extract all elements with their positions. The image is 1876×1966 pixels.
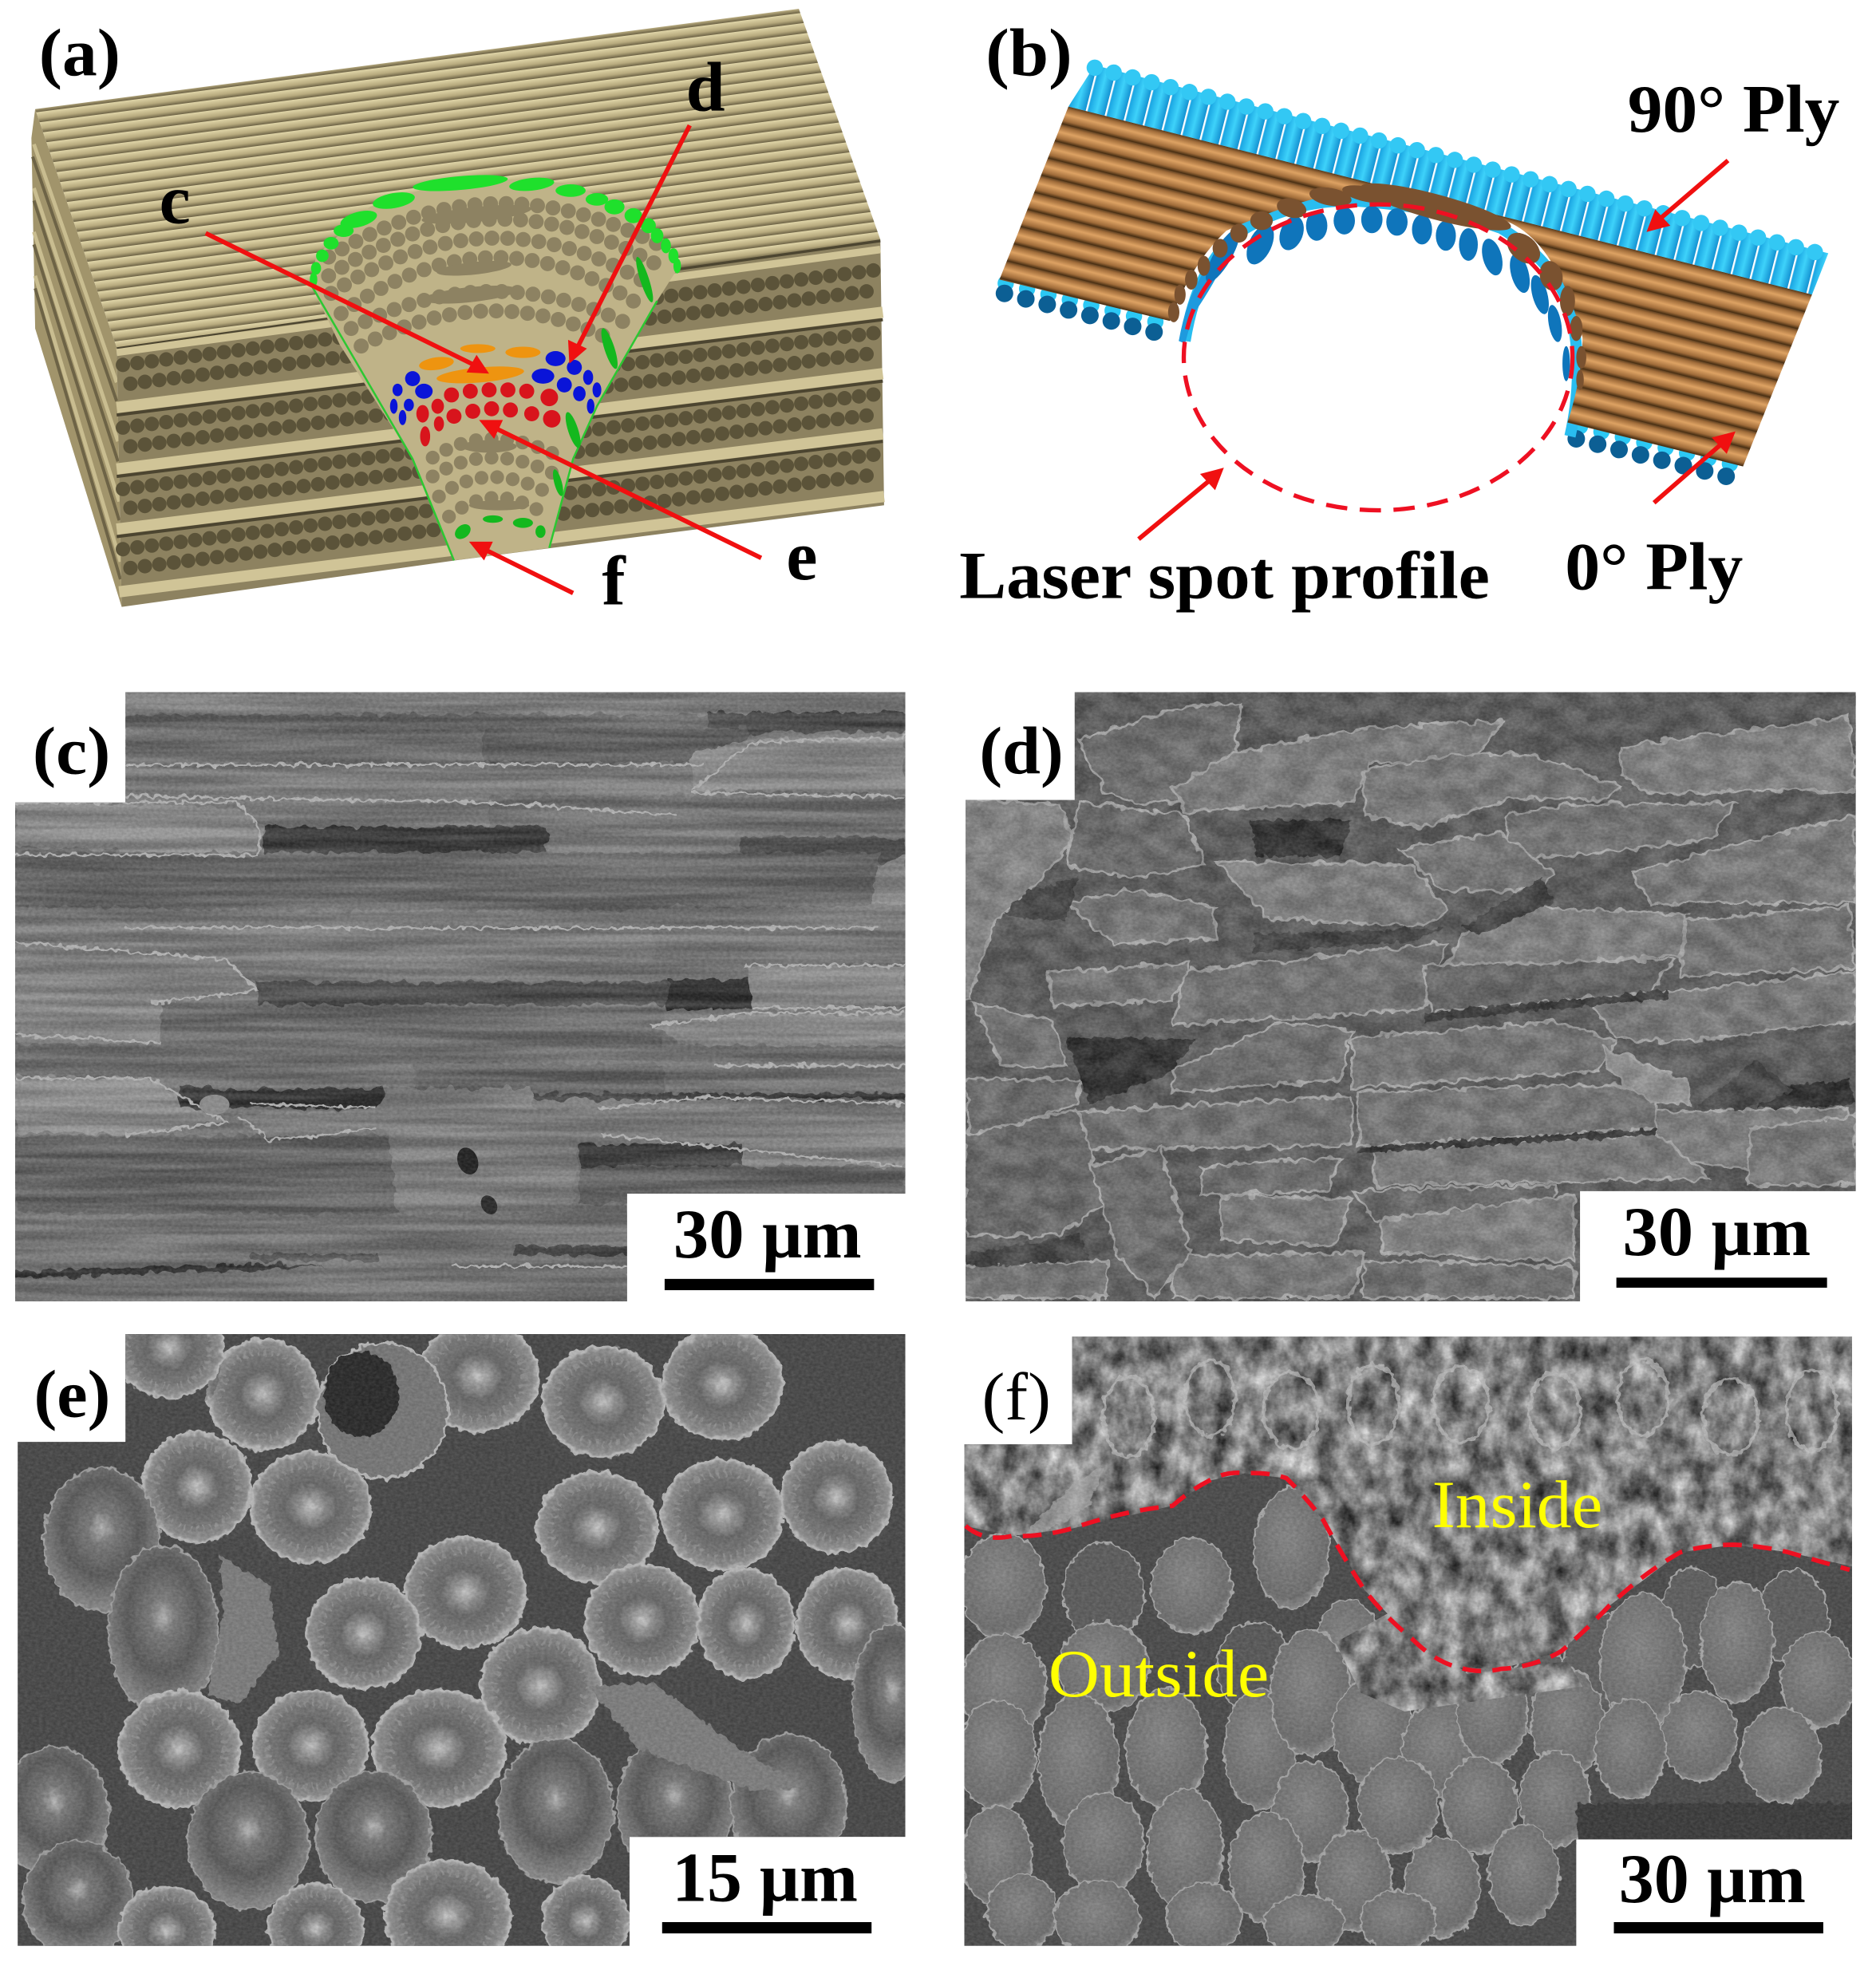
panel label a: (a) — [39, 15, 120, 90]
panel label e: (e) — [34, 1357, 110, 1432]
arrow to f — [469, 542, 573, 593]
conical hole interior — [311, 177, 681, 560]
panel (f): SEM micrograph, inside/outside boundary — [958, 1329, 1866, 1956]
callout d: d — [686, 49, 725, 126]
red fibres (region e) — [417, 382, 560, 446]
panel label f: (f) — [981, 1360, 1051, 1435]
brown cut fibre ends — [1168, 175, 1586, 390]
SEM image c — [15, 692, 909, 1301]
rim of green fibres — [310, 172, 681, 560]
lower blue fibre ends — [1005, 283, 1746, 479]
callout c: c — [160, 162, 191, 239]
SEM fibre streak texture c — [15, 692, 906, 1301]
label 90 degree ply: 90° Ply — [1628, 72, 1839, 147]
scale bar d: 30 µm — [1622, 1194, 1811, 1271]
arrow to d — [568, 125, 689, 364]
laminate left side — [31, 109, 121, 607]
fibre hollow e — [207, 1343, 803, 1790]
laminate front face layers — [117, 239, 884, 607]
blue fibres (region d) — [390, 351, 602, 425]
laminate top face — [35, 9, 880, 347]
arrow to 0 degree ply — [1654, 432, 1736, 503]
SEM image f — [958, 1329, 1866, 1956]
SEM image d — [962, 692, 1856, 1301]
label 0 degree ply: 0° Ply — [1565, 530, 1743, 605]
callout e: e — [786, 518, 817, 595]
SEM image e — [0, 1298, 934, 1966]
panel label b: (b) — [985, 15, 1072, 90]
callout f: f — [602, 543, 626, 620]
orange fibres (region c) — [418, 344, 540, 386]
inside damaged region f — [964, 1329, 1856, 1692]
scale bar f: 30 µm — [1619, 1841, 1806, 1918]
0 degree ply fibres — [999, 107, 1812, 467]
dashed boundary line — [966, 1473, 1850, 1671]
SEM surface highlights c — [15, 737, 906, 1274]
arrow to 90 degree ply — [1646, 160, 1728, 232]
90 degree ply fibres — [1068, 65, 1828, 294]
debris below boundary f — [1329, 1605, 1593, 1718]
fibre ends e — [0, 1298, 934, 1966]
arrow to laser spot — [1139, 468, 1224, 539]
label inside: Inside — [1432, 1467, 1602, 1542]
panel (d): SEM micrograph, broken fibres — [962, 692, 1856, 1301]
scale bar c: 30 µm — [673, 1196, 862, 1273]
panel (c): SEM micrograph, longitudinal fibres — [15, 692, 909, 1301]
label laser spot profile: Laser spot profile — [959, 539, 1490, 614]
scale bar e: 15 µm — [672, 1839, 858, 1917]
hole cyan band — [1185, 200, 1578, 436]
panel (e): SEM micrograph, fibre end faces — [18, 1334, 906, 1946]
SEM voids c — [457, 1147, 479, 1174]
label outside: Outside — [1049, 1636, 1269, 1711]
panel label d: (d) — [979, 714, 1064, 789]
panel (b): cross-ply schematic with laser spot — [959, 15, 1839, 614]
outside fibres f — [958, 1488, 1866, 1956]
hole blue inner fibres — [1179, 206, 1570, 381]
arrow to e — [479, 420, 761, 558]
SEM dark gaps d — [966, 820, 1856, 1266]
SEM fracture texture d — [966, 692, 1856, 1301]
arrow to c — [206, 233, 489, 373]
panel label c: (c) — [33, 714, 110, 789]
panel (a): laminate with conical laser hole — [31, 9, 884, 620]
laser spot dashed profile — [1184, 204, 1573, 511]
